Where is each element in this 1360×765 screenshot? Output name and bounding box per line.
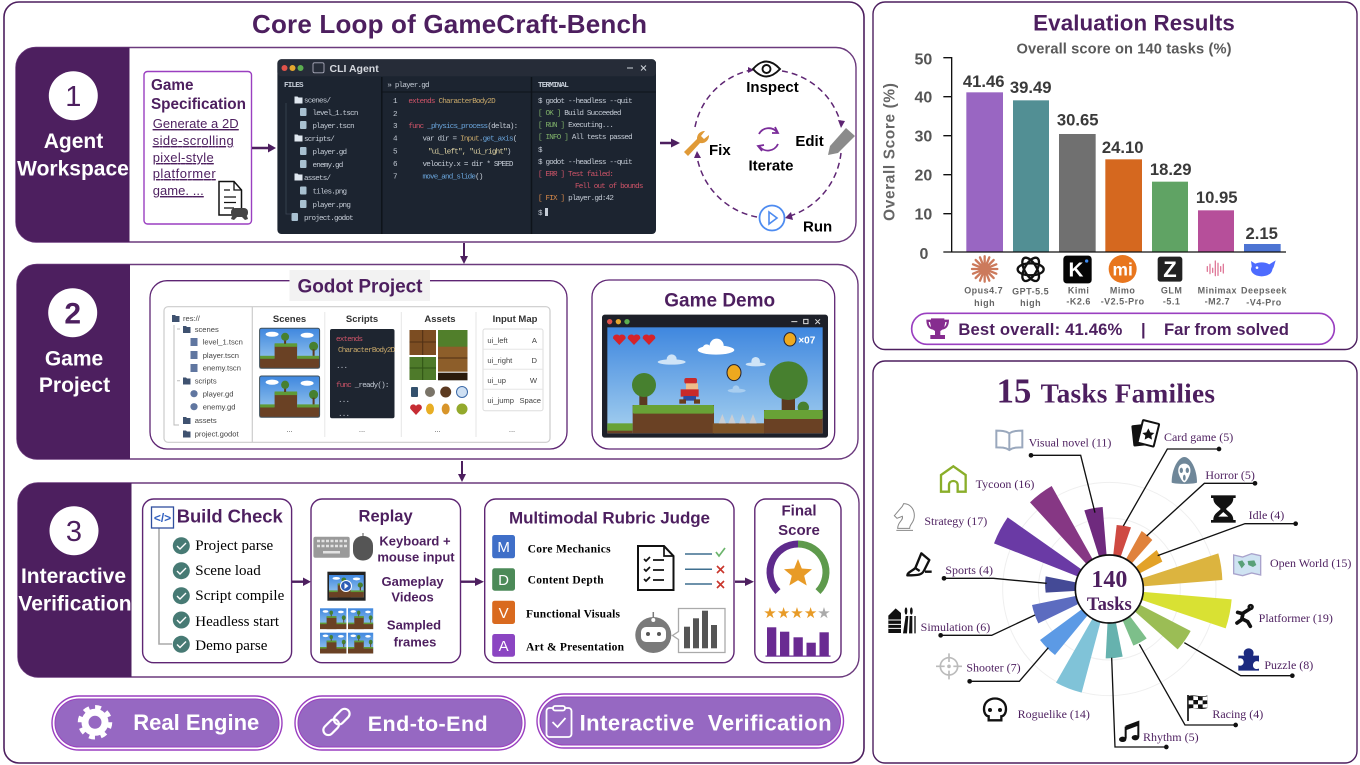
replay card: Gameplay	[382, 574, 444, 589]
icon: map	[1234, 554, 1261, 576]
title: Core Loop of GameCraft-Bench	[252, 9, 647, 39]
icon: hourglass	[1211, 495, 1236, 523]
editor pane: 6	[393, 161, 398, 169]
editor pane: 5	[393, 148, 398, 156]
CLI agent window: CLI Agent	[330, 63, 379, 75]
model labels: high	[974, 298, 995, 308]
icon: play	[760, 206, 784, 230]
terminal pane: [ RUN ] Executing...	[538, 122, 613, 130]
godot project panel: Godot Project	[298, 277, 423, 298]
iterate loop	[684, 62, 855, 236]
model labels: GPT-5.5	[1012, 287, 1049, 297]
icon: gpt	[1018, 255, 1044, 284]
file tree: enemy.gd	[203, 402, 235, 412]
file tree: player.tscn	[203, 351, 239, 360]
file tree: player.gd	[203, 390, 234, 398]
multimodal rubric judge card: Functional Visuals	[526, 609, 621, 621]
family labels: Sports (4)	[945, 563, 993, 577]
editor pane: 2	[393, 111, 398, 119]
icon: document with controller	[219, 182, 248, 220]
icon: iterate	[758, 127, 778, 151]
script preview	[330, 329, 396, 419]
family labels: Shooter (7)	[966, 661, 1021, 675]
godot project panel	[150, 270, 567, 449]
video thumbnail	[327, 572, 366, 601]
bar chart	[881, 51, 1287, 308]
icon: gear	[80, 707, 110, 737]
build check card	[143, 499, 292, 663]
stage 3 label: 3	[66, 516, 82, 548]
game specification card: pixel-style	[153, 150, 214, 165]
rating stars: ★	[804, 605, 817, 622]
model labels: Minimax	[1198, 286, 1237, 296]
family labels: Simulation (6)	[921, 620, 990, 634]
files pane: player.png	[312, 202, 350, 210]
stage 3 label	[18, 483, 132, 677]
game specification card: Specification	[151, 96, 246, 113]
bar values: 2.15	[1245, 224, 1278, 243]
y axis	[881, 51, 952, 263]
center label: 140	[1091, 567, 1127, 593]
replay card: Keyboard +	[379, 534, 451, 549]
leader lines	[941, 449, 1296, 747]
terminal pane: TERMINAL	[538, 82, 569, 90]
rating stars	[763, 605, 831, 622]
panel: stage 1 agent workspace	[16, 48, 856, 242]
family labels: Platformer (19)	[1259, 611, 1333, 625]
arrow: replay to judge	[461, 578, 484, 586]
final score card	[755, 499, 841, 663]
game specification card: Game	[151, 77, 194, 94]
model labels: Deepseek	[1241, 286, 1287, 296]
family labels: Card game (5)	[1164, 430, 1233, 444]
column headings	[273, 314, 538, 325]
family labels: Racing (4)	[1212, 707, 1263, 721]
game specification card: game. ...	[153, 183, 204, 198]
script preview: func _ready():	[336, 382, 389, 390]
arrow: CLI to loop	[660, 138, 680, 148]
file tree: assets	[195, 416, 217, 425]
multimodal rubric judge card: M	[497, 539, 510, 556]
terminal pane: $	[538, 147, 543, 155]
icon: music notes	[1119, 722, 1139, 742]
godot project panel: ...	[286, 425, 293, 434]
game demo panel: Game Demo	[664, 291, 775, 312]
model labels: Mimo	[1110, 286, 1135, 296]
iterate loop: Fix	[709, 142, 731, 159]
arrow: build check to replay	[292, 578, 311, 586]
heading: task families	[997, 372, 1215, 410]
files pane	[284, 82, 358, 223]
stage 3 label: Verification	[18, 593, 132, 616]
multimodal rubric judge card: Content Depth	[528, 574, 604, 586]
icon: glm: Z	[1163, 257, 1177, 282]
final score card: Score	[778, 522, 820, 539]
build check card: Scene load	[195, 563, 261, 579]
family labels: Tycoon (16)	[976, 477, 1034, 491]
godot project panel: ...	[509, 425, 515, 434]
input map	[483, 329, 543, 411]
column headings: Scenes	[273, 314, 306, 325]
sampled frames	[320, 608, 373, 654]
y axis: 50	[915, 51, 932, 68]
input map: D	[532, 356, 538, 365]
rating stars: ★	[777, 605, 790, 622]
icon: code	[152, 507, 174, 528]
input map: ui_jump	[487, 396, 514, 405]
game specification card: side-scrolling	[153, 133, 234, 148]
icon: house	[941, 466, 966, 492]
script preview: extends	[336, 336, 363, 344]
script preview: ...	[338, 411, 349, 419]
build check card: Headless start	[195, 614, 280, 630]
terminal pane: $ godot --headless --quit	[538, 159, 632, 167]
model labels: high	[1020, 298, 1041, 308]
rating stars: ★	[790, 605, 804, 622]
icon: kimi: K	[1069, 259, 1084, 282]
model labels: -V2.5-Pro	[1101, 297, 1145, 307]
model labels: Opus4.7	[964, 286, 1003, 296]
stage 1 label	[16, 48, 130, 242]
panel: stage 3 interactive verification	[18, 483, 859, 677]
game window	[602, 315, 828, 438]
input map: W	[530, 376, 538, 385]
icon: runner	[1237, 606, 1252, 626]
family labels	[921, 430, 1351, 744]
terminal pane	[538, 82, 643, 218]
stage 3 label: Interactive	[21, 565, 126, 588]
editor pane: 7	[393, 174, 397, 182]
family labels: Visual novel (11)	[1029, 436, 1111, 450]
column headings: Assets	[424, 314, 456, 325]
badge: real engine: Real Engine	[133, 710, 259, 735]
icon: scream mask	[1172, 457, 1197, 484]
build check card: Project parse	[195, 538, 274, 554]
script preview: ...	[336, 363, 347, 371]
model labels: -V4-Pro	[1246, 298, 1282, 308]
family labels: Horror (5)	[1205, 468, 1255, 482]
file tree: scenes	[195, 325, 219, 334]
subtitle: Overall score on 140 tasks (%)	[1016, 41, 1232, 57]
iterate loop: Inspect	[746, 79, 799, 96]
terminal pane: [ ERR ] Test failed:	[538, 171, 613, 179]
icon: opus	[972, 256, 997, 282]
icon: checklist	[638, 546, 725, 590]
family labels: Roguelike (14)	[1018, 707, 1090, 721]
y axis: 0	[919, 246, 928, 263]
arrow: specification to CLI	[252, 144, 276, 152]
y axis: 30	[915, 129, 932, 146]
icon: wrench	[684, 131, 709, 156]
badge: interactive verification	[537, 694, 844, 748]
file tree: enemy.tscn	[203, 364, 241, 372]
panel: core loop	[4, 2, 864, 763]
editor pane: » player.gd	[387, 82, 429, 90]
script preview: ...	[338, 397, 349, 405]
callout: best overall	[912, 313, 1334, 344]
editor pane: var dir = Input.get_axis(	[422, 136, 517, 144]
replay card	[311, 499, 460, 663]
replay card: Sampled	[387, 617, 441, 632]
game window: ×07	[798, 335, 816, 346]
game specification card: platformer	[153, 166, 216, 181]
column headings: Input Map	[493, 314, 538, 325]
family labels: Puzzle (8)	[1264, 658, 1313, 672]
panel: evaluation results	[873, 2, 1357, 350]
bar values: 24.10	[1102, 138, 1144, 157]
model labels	[964, 286, 1287, 308]
file tree: project.godot	[195, 430, 239, 438]
stage 2 label: 2	[64, 298, 81, 330]
files pane: level_1.tscn	[312, 110, 358, 118]
build check card: Build Check	[177, 505, 283, 526]
files pane: scenes/	[304, 98, 332, 106]
stage 2 label: Game	[45, 348, 103, 371]
icon: trophy	[926, 318, 949, 339]
model labels: GLM	[1161, 286, 1182, 296]
editor pane: extends CharacterBody2D	[408, 98, 496, 106]
icon: star	[784, 559, 812, 586]
final score card: Final	[781, 503, 817, 520]
family labels: Open World (15)	[1270, 556, 1351, 570]
icon: link	[321, 707, 352, 737]
heading: task families: Tasks Families	[1041, 378, 1215, 408]
icon: hero character	[679, 378, 700, 404]
input map: A	[532, 336, 538, 345]
build check card: Script compile	[195, 588, 285, 604]
replay card: mouse input	[377, 550, 455, 565]
multimodal rubric judge card: D	[498, 572, 509, 589]
terminal pane: [ INFO ] All tests passed	[538, 134, 632, 142]
y axis: 20	[915, 167, 932, 184]
icon: eye	[753, 62, 780, 76]
score gauge	[770, 544, 826, 592]
input map: Space	[519, 396, 541, 405]
stage 1 label: Agent	[44, 130, 103, 153]
radial chart	[938, 447, 1298, 749]
callout: best overall: Far from solved	[1164, 320, 1289, 339]
column headings: Scripts	[346, 314, 378, 325]
replay card: Videos	[391, 590, 434, 605]
multimodal rubric judge card: A	[499, 638, 509, 655]
score bars	[766, 627, 830, 657]
replay card: Replay	[359, 508, 413, 526]
files pane: tiles.png	[312, 188, 347, 196]
scene thumbnails	[260, 328, 320, 417]
CLI agent window	[277, 59, 656, 234]
file tree: scripts	[195, 376, 217, 386]
heading: task families: 15	[997, 372, 1031, 410]
icon: pencil	[828, 128, 855, 155]
callout: best overall: Best overall: 41.46%	[958, 320, 1123, 339]
badge: real engine	[52, 696, 282, 750]
heading: evaluation results: Evaluation Results	[1033, 11, 1235, 36]
icon: glm	[1158, 257, 1182, 282]
files pane: FILES	[284, 82, 304, 90]
godot project panel: ...	[359, 425, 365, 434]
bar values: 39.49	[1010, 78, 1052, 97]
icon: puzzle	[1238, 648, 1259, 671]
terminal pane: $	[538, 210, 543, 218]
editor pane: "ui_left", "ui_right")	[428, 148, 511, 156]
wedges	[994, 486, 1232, 693]
file tree: res://	[183, 314, 201, 323]
panel: task families	[873, 361, 1357, 763]
build check card: Demo parse	[195, 638, 268, 654]
input map: ui_right	[487, 356, 513, 365]
icon: minimax	[1207, 261, 1223, 276]
files pane: project.godot	[304, 215, 353, 223]
center label	[1075, 555, 1143, 623]
badge: end to end: End-to-End	[368, 712, 488, 736]
arrow: judge to final score	[735, 578, 754, 586]
model labels: -K2.6	[1066, 297, 1091, 307]
iterate loop: Iterate	[748, 158, 794, 174]
icon: mimo: mi	[1113, 260, 1133, 280]
icon: robot with chart	[635, 608, 725, 653]
game specification card	[144, 72, 252, 224]
files pane: enemy.gd	[312, 162, 343, 170]
icon: chess knight	[894, 504, 914, 530]
godot project panel: ...	[434, 425, 441, 434]
editor pane	[387, 82, 517, 182]
game demo panel	[592, 280, 835, 449]
icon: mimo	[1109, 255, 1137, 283]
badge: interactive verification: Interactive Verification	[580, 711, 832, 736]
y axis: 40	[915, 89, 932, 106]
icon: shoe	[907, 553, 932, 575]
icon: farm	[888, 607, 916, 633]
model labels: -M2.7	[1205, 297, 1230, 307]
y axis: Overall Score (%)	[881, 83, 898, 221]
editor pane: 1	[393, 98, 398, 106]
icon: kimi	[1063, 256, 1092, 283]
arrow: stage 1 to stage 2	[460, 243, 468, 264]
icon: deepseek	[1251, 260, 1276, 276]
file tree: level_1.tscn	[203, 338, 243, 346]
bar values	[963, 72, 1278, 243]
stage 2 label: Project	[39, 374, 110, 397]
files pane: player.tscn	[312, 123, 354, 131]
multimodal rubric judge card: Multimodal Rubric Judge	[509, 508, 710, 527]
file tree	[172, 314, 243, 438]
bar values: 18.29	[1150, 160, 1192, 179]
terminal pane: $ godot --headless --quit	[538, 98, 632, 106]
bar values: 30.65	[1057, 111, 1099, 130]
iterate loop: Run	[803, 218, 832, 236]
rating stars: ★	[763, 605, 777, 622]
rating stars: ★	[817, 605, 831, 622]
stage 1 label: 1	[65, 81, 81, 113]
files pane: assets/	[304, 175, 332, 183]
callout: best overall: |	[1141, 320, 1146, 339]
terminal pane: [ FIX ] player.gd:42	[538, 195, 614, 203]
y axis: 10	[915, 207, 932, 224]
input map: ui_left	[487, 336, 509, 345]
icon: book	[996, 431, 1022, 450]
multimodal rubric judge card: V	[499, 605, 509, 622]
asset tiles	[410, 330, 468, 415]
icon: keyboard and mouse	[313, 533, 373, 560]
iterate loop: Edit	[795, 133, 824, 150]
family labels: Idle (4)	[1249, 508, 1284, 522]
stage 2 label	[17, 264, 130, 459]
stage 1 label: Workspace	[17, 158, 129, 181]
icon: crosshair	[936, 653, 962, 679]
model labels: -5.1	[1163, 297, 1180, 307]
editor pane: move_and_slide()	[422, 174, 483, 182]
panel: stage 2 game project	[17, 264, 858, 459]
replay card: frames	[394, 635, 436, 650]
game specification card: Generate a 2D	[153, 116, 239, 131]
icon: skull	[984, 698, 1006, 720]
arrow: stage 2 to stage 3	[458, 461, 466, 482]
icon: racing flag	[1188, 695, 1207, 721]
multimodal rubric judge card: Art & Presentation	[526, 641, 625, 653]
icon: cards	[1131, 420, 1159, 447]
center label: Tasks	[1087, 594, 1132, 615]
model labels: Kimi	[1068, 286, 1089, 296]
terminal pane: [ OK ] Build Succeeded	[538, 110, 621, 118]
family labels: Strategy (17)	[924, 514, 987, 528]
input map: ui_up	[487, 376, 506, 385]
multimodal rubric judge card: Core Mechanics	[528, 544, 611, 556]
icon: clipboard	[546, 706, 572, 737]
editor pane: func _physics_process(delta):	[408, 123, 517, 131]
files pane: scripts/	[304, 136, 335, 144]
terminal pane: Fell out of bounds	[575, 183, 643, 191]
editor pane: velocity.x = dir * SPEED	[422, 161, 514, 169]
editor pane: 4	[393, 136, 398, 144]
bar values: 41.46	[963, 72, 1005, 91]
family labels: Rhythm (5)	[1143, 730, 1199, 744]
bars	[966, 92, 1281, 252]
files pane: player.gd	[312, 149, 347, 157]
script preview: CharacterBody2D	[338, 347, 396, 355]
icon: code: </>	[154, 511, 171, 525]
badge: end to end	[295, 696, 525, 750]
editor pane: 3	[393, 123, 398, 131]
multimodal rubric judge card	[485, 499, 734, 663]
bar values: 10.95	[1196, 188, 1238, 207]
